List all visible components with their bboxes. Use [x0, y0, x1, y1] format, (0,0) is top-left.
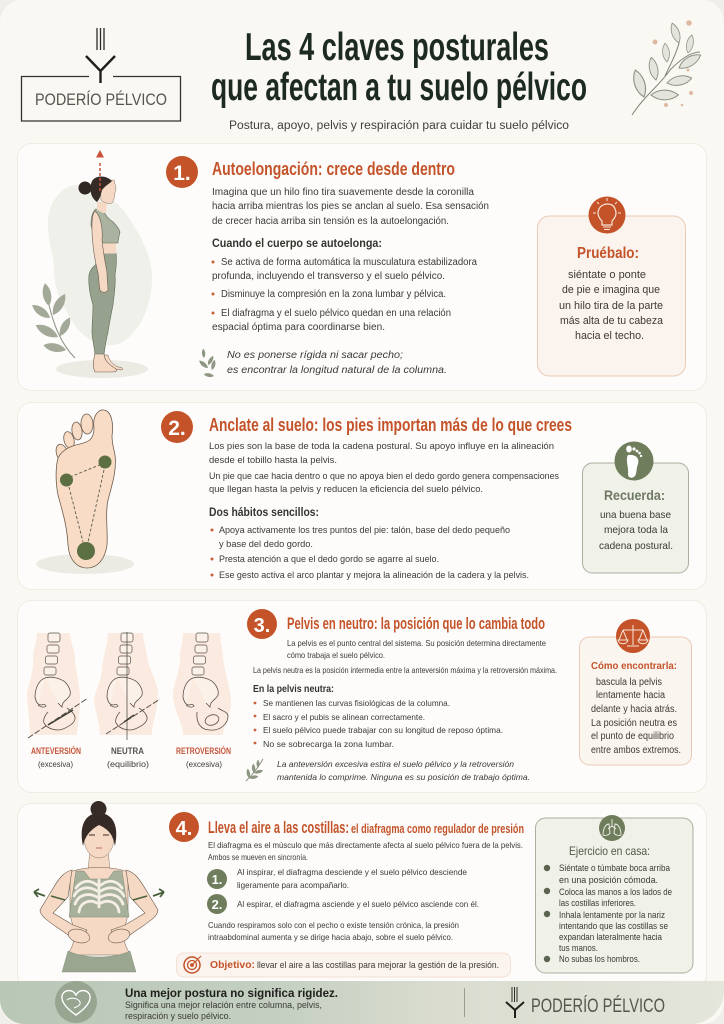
heading 4: [208, 819, 524, 837]
callout: cómo encontrarla: lentamente hacia: [596, 690, 666, 701]
callout: objetivo: llevar el aire a las costillas para mejorar la gestión de la presión.: [257, 960, 499, 971]
bullet list: Disminuye la compresión en la zona lumbar y pélvica.: [221, 289, 446, 300]
icon: heart badge: [55, 981, 97, 1023]
title: [211, 26, 587, 109]
diagram: retroversión: [173, 633, 231, 769]
number badge 2: 2.: [168, 417, 186, 440]
italic note: La anteversión excesiva estira el suelo pélvico y la retroversión: [277, 760, 514, 769]
bullet list: y base del dedo gordo.: [219, 538, 313, 549]
number badge 2: [161, 411, 193, 443]
italic note: [277, 760, 530, 782]
heading 4: el diafragma como regulador de presión: [351, 822, 524, 836]
callout: pruébalo: más alta de tu cabeza: [560, 315, 664, 327]
illustration: standing woman: [48, 150, 152, 378]
bullet list: El suelo pélvico puede trabajar con su longitud de reposo óptima.: [263, 726, 503, 735]
callout: recuerda: cadena postural.: [599, 540, 673, 552]
bullet list: El diafragma y el suelo pélvico quedan en una relación: [221, 308, 451, 319]
subtitle: Postura, apoyo, pelvis y respiración para cuidar tu suelo pélvico: [229, 120, 569, 132]
panel 2: anclaje al suelo: [18, 402, 706, 590]
callout: cómo encontrarla: [580, 619, 692, 765]
callout: cómo encontrarla: Cómo encontrarla:: [591, 660, 677, 672]
intro text: desde el tobillo hasta la pelvis.: [209, 454, 337, 465]
intro text: que llegan hasta la pelvis y reducen la eficiencia del suelo pélvico.: [209, 483, 483, 494]
footer message: Una mejor postura no significa rigidez.: [125, 986, 338, 1000]
bullet list: [212, 257, 477, 333]
bullet list: Ese gesto activa el arco plantar y mejora la alineación de la cadera y la pelvis.: [219, 569, 529, 580]
heading 2: Anclate al suelo: los pies importan más de lo que crees: [209, 415, 572, 435]
number badge 1: [166, 156, 198, 188]
icon: decorative branch top right: [630, 20, 703, 115]
intro text: [212, 187, 489, 227]
callout: objetivo: Objetivo:: [210, 960, 255, 971]
callout: recuerda: [582, 442, 688, 573]
subheading: En la pelvis neutra:: [253, 683, 334, 695]
number badge 1: 1.: [173, 162, 191, 185]
illustration: foot sole with three support points: [36, 410, 134, 574]
footer logo: [506, 987, 665, 1018]
illustration: woman with rib cage: [34, 801, 164, 972]
heading 3: Pelvis en neutro: la posición que lo cambia todo: [287, 615, 545, 633]
footer message: Significa una mejor relación entre columna, pelvis,: [125, 1000, 322, 1011]
bullet list: espacial óptima para coordinarse bien.: [212, 322, 385, 333]
intro text: Imagina que un hilo fino tira suavemente desde la coronilla: [212, 187, 474, 198]
callout: objetivo: [176, 953, 510, 977]
bullet list: [210, 524, 529, 580]
callout: pruébalo: hacia el techo.: [575, 330, 644, 342]
icon: footprint: [614, 442, 654, 480]
icon: balance scale: [616, 619, 650, 653]
step 2: [207, 894, 479, 914]
panel 3: pelvis en neutro: [18, 600, 706, 792]
callout: recuerda: una buena base: [600, 509, 671, 521]
intro text: Un pie que cae hacia dentro o que no apoya bien el dedo gordo genera compensaciones: [209, 470, 559, 481]
bullet list: Apoya activamente los tres puntos del pie: talón, base del dedo pequeño: [219, 524, 510, 535]
bullet list: El sacro y el pubis se alinean correctamente.: [263, 713, 425, 722]
intro text: El diafragma es el músculo que más directamente afecta al suelo pélvico fuera de la pelvis.: [208, 841, 523, 850]
heading 1: Autoelongación: crece desde dentro: [212, 159, 455, 179]
bullet list: Se mantienen las curvas fisiológicas de la columna.: [263, 699, 450, 708]
intro text: [208, 841, 523, 862]
callout: ejercicio en casa: Coloca las manos a los lados de: [559, 887, 672, 897]
callout: pruébalo: un hilo tira de la parte: [559, 300, 663, 312]
footer message: [125, 986, 338, 1022]
callout: pruébalo: siéntate o ponte: [568, 269, 646, 281]
callout: ejercicio en casa: las costillas inferiores.: [559, 898, 636, 908]
intro text: [253, 639, 557, 675]
icon: target: [184, 956, 201, 973]
icon: small sprig: [246, 759, 264, 781]
diagram: neutra: NEUTRA: [111, 746, 144, 756]
icon: light bulb: [588, 196, 626, 234]
callout: ejercicio en casa: en una posición cómoda.: [559, 875, 658, 885]
callout: cómo encontrarla: La posición neutra es: [591, 718, 677, 729]
step 2: 2.: [212, 897, 222, 912]
number badge 4: [169, 812, 199, 842]
intro text: Ambos se mueven en sincronía.: [208, 853, 308, 862]
callout: ejercicio en casa: [536, 815, 693, 973]
intro text: de crecer hacia arriba sin tensión es la autoelongación.: [212, 216, 449, 227]
callout: pruébalo: de pie e imagina que: [562, 284, 660, 296]
callout: cómo encontrarla: entre ambos extremos.: [591, 745, 681, 756]
callout: recuerda: mejora toda la: [604, 524, 668, 536]
diagram: retroversión: (excesiva): [186, 759, 222, 769]
callout: cómo encontrarla: delante y hacia atrás.: [591, 704, 677, 715]
callout: cómo encontrarla: bascula la pelvis: [596, 677, 662, 688]
intro text: hacia arriba mientras los pies se anclan al suelo. Esa sensación: [212, 201, 489, 212]
bullet list: Se activa de forma automática la musculatura estabilizadora: [221, 257, 477, 268]
italic note: mantenida lo comprime. Ninguna es su posición de trabajo óptima.: [277, 773, 530, 782]
step 1: 1.: [212, 872, 222, 887]
footer message: respiración y suelo pélvico.: [125, 1011, 231, 1022]
bullet list: [254, 699, 503, 749]
intro text: La pelvis es el punto central del sistema. Su posición determina directamente: [287, 639, 546, 648]
diagram: neutra: (equilibrio): [107, 759, 149, 769]
callout: pruébalo: [538, 196, 686, 376]
diagram: anteversión: ANTEVERSIÓN: [31, 745, 81, 756]
number badge 3: 3.: [254, 615, 270, 637]
step 1: [207, 868, 467, 890]
bullet list: No se sobrecarga la zona lumbar.: [263, 740, 394, 749]
icon: lungs: [599, 815, 625, 841]
illustration: leaf sprig: [30, 283, 75, 358]
bullet list: Presta atención a que el dedo gordo se agarre al suelo.: [219, 553, 439, 564]
number badge 3: [247, 609, 277, 639]
callout: cómo encontrarla: el punto de equilibrio: [591, 731, 675, 742]
panel 4: respiración: [18, 801, 706, 988]
number badge 4: 4.: [176, 818, 192, 840]
step 2: Al espirar, el diafragma asciende y el suelo pélvico asciende con él.: [237, 900, 479, 909]
callout: ejercicio en casa: Siéntate o túmbate boca arriba: [559, 863, 670, 873]
italic note: es encontrar la longitud natural de la columna.: [227, 365, 447, 376]
subheading: Cuando el cuerpo se autoelonga:: [212, 238, 382, 250]
heading 4: Lleva el aire a las costillas:: [208, 819, 349, 837]
subheading: Dos hábitos sencillos:: [209, 507, 319, 519]
logo: Poderío Pélvico: PODERÍO PÉLVICO: [35, 90, 167, 109]
icon: small sprig: [198, 348, 217, 378]
closing text: [208, 921, 459, 942]
footer logo: PODERÍO PÉLVICO: [531, 996, 665, 1017]
title: Las 4 claves posturales: [245, 26, 549, 69]
diagram: anteversión: (excesiva): [38, 759, 73, 769]
bullet list: profunda, incluyendo el transverso y el suelo pélvico.: [212, 271, 445, 282]
intro text: Los pies son la base de toda la cadena postural. Su apoyo influye en la alineación: [209, 440, 554, 451]
callout: pruébalo: Pruébalo:: [577, 245, 639, 262]
callout: ejercicio en casa: No subas los hombros.: [559, 954, 640, 964]
intro text: La pelvis neutra es la posición intermedia entre la anteversión máxima y la retroversión máxima.: [253, 666, 557, 675]
step 1: ligeramente para acompañarlo.: [237, 881, 349, 890]
diagram: anteversión: [27, 633, 88, 769]
closing text: Cuando respiramos solo con el pecho o existe tensión crónica, la presión: [208, 921, 459, 930]
italic note: No es ponerse rígida ni sacar pecho;: [227, 350, 403, 361]
footer band: [0, 981, 724, 1024]
callout: ejercicio en casa: Ejercicio en casa:: [569, 844, 650, 858]
panel 1: autoelongación: [18, 144, 706, 390]
diagram: neutra: [94, 632, 160, 769]
callout: ejercicio en casa: Inhala lentamente por la nariz: [559, 910, 665, 920]
closing text: intraabdominal aumenta y se dirige hacia abajo, sobre el suelo pélvico.: [208, 933, 453, 942]
callout: recuerda: Recuerda:: [604, 487, 665, 503]
callout: ejercicio en casa: intentando que las costillas se: [559, 921, 668, 931]
callout: ejercicio en casa: tus manos.: [559, 943, 598, 953]
logo: Poderío Pélvico: [22, 28, 180, 121]
callout: ejercicio en casa: expandan lateralmente hacia: [559, 932, 662, 942]
italic note: [227, 350, 447, 376]
intro text: cómo trabaja el suelo pélvico.: [287, 651, 385, 660]
step 1: Al inspirar, el diafragma desciende y el suelo pélvico desciende: [237, 868, 467, 877]
intro text: [209, 440, 559, 494]
diagram: retroversión: RETROVERSIÓN: [176, 745, 231, 756]
